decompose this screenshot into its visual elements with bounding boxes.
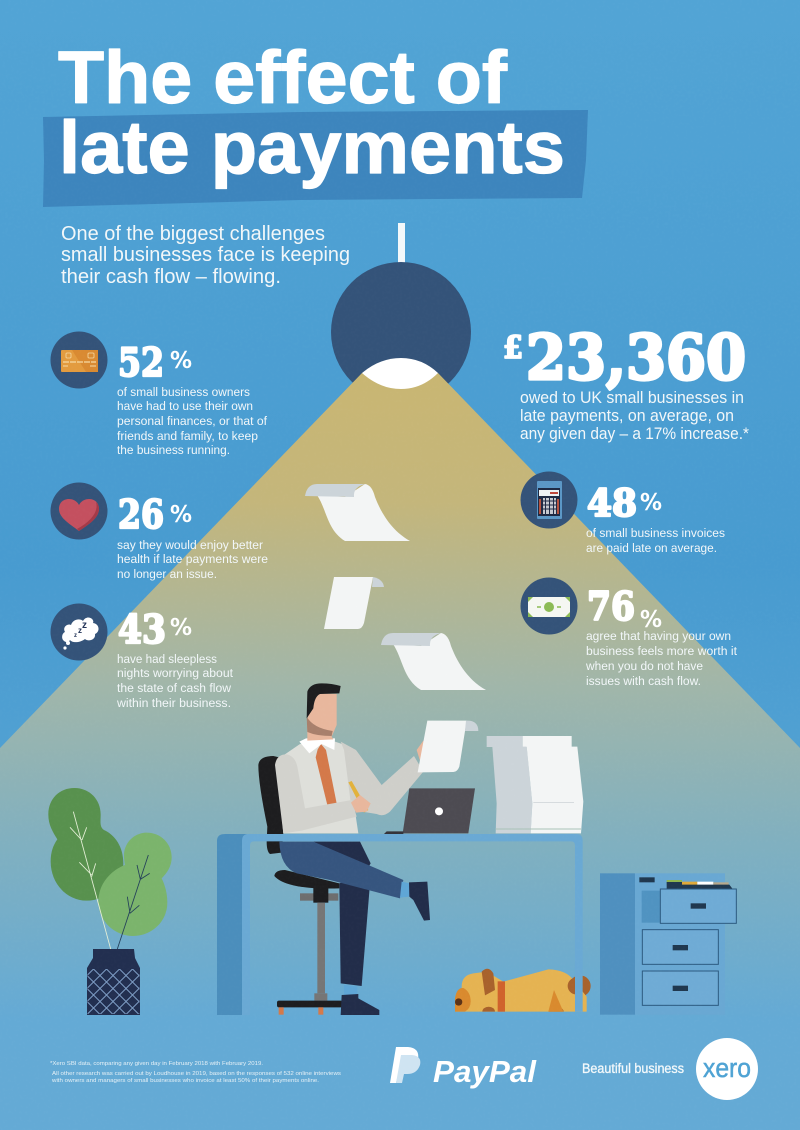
beard [307, 717, 333, 736]
figure 43: 43 [118, 607, 166, 653]
description: agree that having your own [586, 629, 731, 643]
title line one: The effect of [58, 36, 507, 119]
laptop [403, 788, 475, 833]
falling paper two [324, 577, 384, 629]
percent sign: % [170, 502, 192, 528]
icon: sleep cloud [50, 604, 108, 660]
necktie [316, 744, 337, 805]
description [117, 538, 268, 581]
PayPal wordmark: PayPal [433, 1054, 537, 1089]
falling paper three [381, 633, 486, 690]
chair seat [274, 870, 339, 889]
intro text: small businesses face is keeping [61, 244, 350, 266]
title banner [43, 110, 588, 207]
intro text [61, 223, 350, 288]
collar [299, 738, 335, 753]
stat: 76% [520, 578, 738, 688]
Xero logo [582, 1038, 758, 1100]
lamp cord [398, 223, 405, 263]
bottom drawer [642, 971, 718, 1005]
PayPal logo [390, 1047, 537, 1089]
footnotes: with owners and managers of small businesses who invoice at least 50% of their payments online. [51, 1078, 319, 1084]
description: no longer an issue. [117, 567, 217, 581]
figure 76: 76 [587, 584, 635, 630]
dog [455, 969, 591, 1012]
bulb [362, 358, 438, 389]
footnotes [50, 1061, 341, 1084]
figure 23,360: 23,360 [526, 321, 746, 394]
description [520, 388, 749, 443]
chair back [258, 756, 283, 854]
far arm [341, 742, 423, 815]
stat: 43% [50, 604, 234, 710]
description: have had sleepless [117, 652, 217, 666]
icon: banknote [520, 578, 578, 634]
filing cabinet [600, 873, 736, 1015]
figure 26: 26 [118, 492, 164, 538]
title [43, 36, 588, 207]
vase [87, 949, 140, 1015]
icon: sleep cloud: z [74, 633, 77, 639]
description: late payments, on average, on [520, 406, 734, 425]
description: are paid late on average. [586, 541, 717, 555]
falling paper one [305, 484, 410, 541]
hair [307, 683, 341, 718]
plant in vase [48, 788, 172, 1015]
icon: credit card [50, 332, 108, 388]
intro text: One of the biggest challenges [61, 223, 325, 245]
light leaf [98, 833, 172, 936]
stat: £23,360 [503, 321, 749, 443]
file tabs [667, 880, 733, 889]
description: when you do not have [585, 659, 703, 673]
foot on floor [344, 985, 357, 995]
percent sign: % [640, 490, 662, 516]
title line two: late payments [59, 106, 565, 189]
tagline: Beautiful business [582, 1061, 684, 1076]
icon: calculator [520, 472, 578, 528]
pale stem [70, 812, 111, 949]
percent sign: % [170, 348, 192, 374]
held paper [418, 721, 467, 772]
near arm [275, 754, 357, 833]
description: any given day – a 17% increase.* [520, 424, 749, 443]
description: friends and family, to keep [117, 429, 258, 443]
stat: 52% [50, 332, 268, 457]
lower leg [339, 870, 370, 986]
description [116, 652, 234, 710]
description: within their business. [116, 696, 231, 710]
description: of small business invoices [586, 526, 725, 540]
description [585, 629, 738, 688]
description: the business running. [117, 443, 230, 457]
description: business feels more worth it [586, 644, 738, 658]
description: owed to UK small businesses in [520, 388, 744, 407]
icon: PayPal mark [390, 1047, 420, 1083]
percent sign: % [170, 615, 192, 641]
icon: sleep cloud: z [82, 620, 87, 631]
description [117, 385, 268, 457]
Xero wordmark: xero [703, 1053, 751, 1083]
stat: 48% [520, 472, 725, 555]
description: of small business owners [117, 385, 250, 399]
percent sign: % [640, 607, 662, 633]
hand holding paper [417, 741, 427, 761]
footnotes: *Xero SBI data, comparing any given day in February 2018 with February 2019. [50, 1061, 263, 1067]
hand with pen [351, 795, 371, 813]
thigh [313, 842, 371, 870]
figure 52: 52 [118, 340, 164, 386]
foot raised [400, 882, 410, 898]
lamp shade [331, 262, 471, 402]
dark leaf [48, 788, 123, 901]
icon: heart [50, 482, 108, 540]
description: personal finances, or that of [117, 414, 268, 428]
man at desk with dog [217, 683, 591, 1015]
description: say they would enjoy better [117, 538, 263, 552]
middle drawer [642, 930, 718, 964]
intro text: their cash flow – flowing. [61, 266, 281, 288]
open drawer [660, 889, 736, 923]
icon: sleep cloud: z [78, 626, 82, 635]
chair column and base [277, 885, 343, 1015]
torso [277, 742, 358, 833]
paper stack [487, 736, 523, 747]
description: issues with cash flow. [586, 674, 701, 688]
Xero badge [696, 1038, 758, 1100]
pound sign: £ [503, 330, 523, 366]
neck and face [307, 693, 337, 741]
stat: 26% [50, 482, 268, 581]
description: nights worrying about [117, 666, 234, 680]
light cone [0, 373, 800, 1130]
crossed leg [279, 842, 403, 898]
pen [348, 781, 368, 813]
description [586, 526, 725, 555]
desk side panel [217, 834, 247, 1015]
dark stem [117, 855, 150, 949]
description: the state of cash flow [117, 681, 231, 695]
footnotes: All other research was carried out by Loudhouse in 2019, based on the responses of 532 online interviews [52, 1071, 341, 1077]
figure 48: 48 [587, 481, 637, 525]
desk frame [242, 834, 583, 1015]
description: health if late payments were [117, 552, 268, 566]
description: have had to use their own [117, 399, 253, 413]
